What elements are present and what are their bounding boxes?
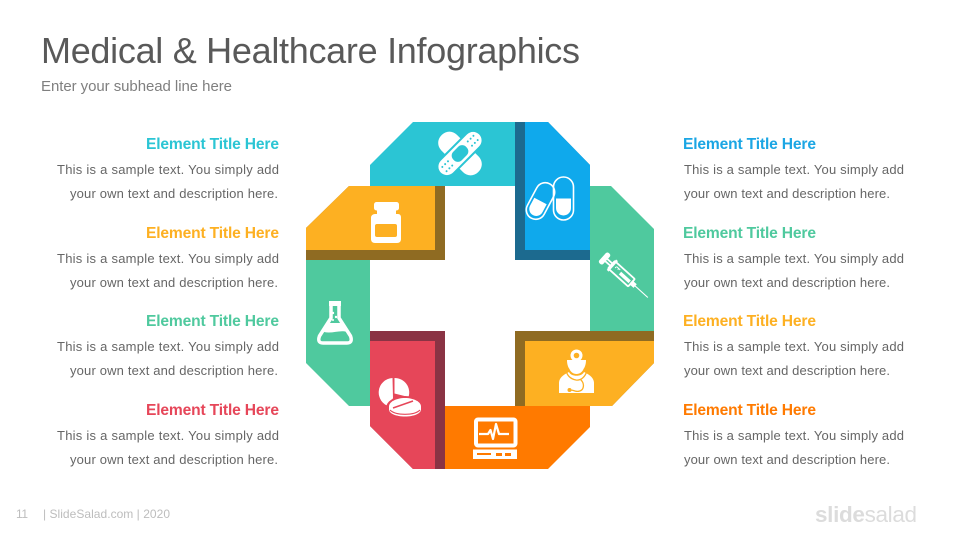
text block: left 1: This is a sample text. You simply add bbox=[57, 162, 279, 177]
icon: medicine bottle bbox=[371, 202, 401, 243]
text block: right 2: Element Title Here bbox=[683, 225, 816, 242]
text block: left 3: your own text and description here. bbox=[70, 363, 278, 378]
icon: heart monitor bbox=[473, 420, 517, 459]
text block: right 2: your own text and description here. bbox=[684, 275, 890, 290]
segment: yellow right bbox=[515, 331, 654, 406]
subhead: Enter your subhead line here bbox=[41, 78, 232, 95]
segment: red bottom left bbox=[370, 331, 445, 469]
icon: pie and pill bbox=[379, 378, 424, 420]
medical cross diagram bbox=[306, 114, 654, 469]
text block: right 1: Element Title Here bbox=[683, 136, 816, 153]
text block: left 2: This is a sample text. You simply add bbox=[57, 251, 279, 266]
icon: bandage bbox=[420, 114, 500, 193]
segment: yellow left bbox=[306, 186, 445, 260]
text block: left 3 bbox=[57, 313, 279, 378]
footer bbox=[16, 507, 170, 521]
text block: left 4 bbox=[57, 402, 279, 467]
text block: right 3: your own text and description here. bbox=[684, 363, 890, 378]
text block: left 2: your own text and description here. bbox=[70, 275, 278, 290]
segment: orange bottom bbox=[445, 406, 590, 469]
text block: right 1: This is a sample text. You simply add bbox=[684, 162, 904, 177]
text block: right 4: your own text and description here. bbox=[684, 452, 890, 467]
text block: right 2: This is a sample text. You simply add bbox=[684, 251, 904, 266]
text block: right 4: This is a sample text. You simply add bbox=[684, 428, 904, 443]
text block: left 3: Element Title Here bbox=[146, 313, 279, 330]
text block: left 3: This is a sample text. You simply add bbox=[57, 339, 279, 354]
text block: left 4: your own text and description here. bbox=[70, 452, 278, 467]
text block: right 3 bbox=[683, 313, 904, 378]
text block: left 4: Element Title Here bbox=[146, 402, 279, 419]
text block: right 1: your own text and description here. bbox=[684, 186, 890, 201]
segment: blue top right bbox=[515, 122, 590, 260]
icon: flask bbox=[319, 301, 351, 343]
left text column bbox=[57, 136, 279, 467]
right text column bbox=[683, 136, 904, 467]
text block: right 4: Element Title Here bbox=[683, 402, 816, 419]
text block: left 2: Element Title Here bbox=[146, 225, 279, 242]
text block: right 3: This is a sample text. You simply add bbox=[684, 339, 904, 354]
logo: slidesalad bbox=[815, 502, 917, 527]
text block: right 3: Element Title Here bbox=[683, 313, 816, 330]
text block: right 4 bbox=[683, 402, 904, 467]
title: Medical & Healthcare Infographics bbox=[41, 30, 580, 71]
icon: doctor bbox=[559, 350, 594, 393]
text block: right 1 bbox=[683, 136, 904, 201]
segment: teal top bbox=[370, 122, 515, 186]
text block: left 2 bbox=[57, 225, 279, 290]
text block: left 1: your own text and description here. bbox=[70, 186, 278, 201]
text block: left 1: Element Title Here bbox=[146, 136, 279, 153]
text block: right 2 bbox=[683, 225, 904, 290]
text block: left 4: This is a sample text. You simply add bbox=[57, 428, 279, 443]
icon: capsules bbox=[523, 177, 574, 223]
segment: green left bbox=[306, 260, 370, 406]
text block: left 1 bbox=[57, 136, 279, 201]
icon: syringe bbox=[599, 252, 653, 303]
page number: 11 bbox=[16, 507, 28, 521]
footer source: | SlideSalad.com | 2020 bbox=[43, 507, 170, 521]
segment: green right bbox=[590, 186, 654, 331]
